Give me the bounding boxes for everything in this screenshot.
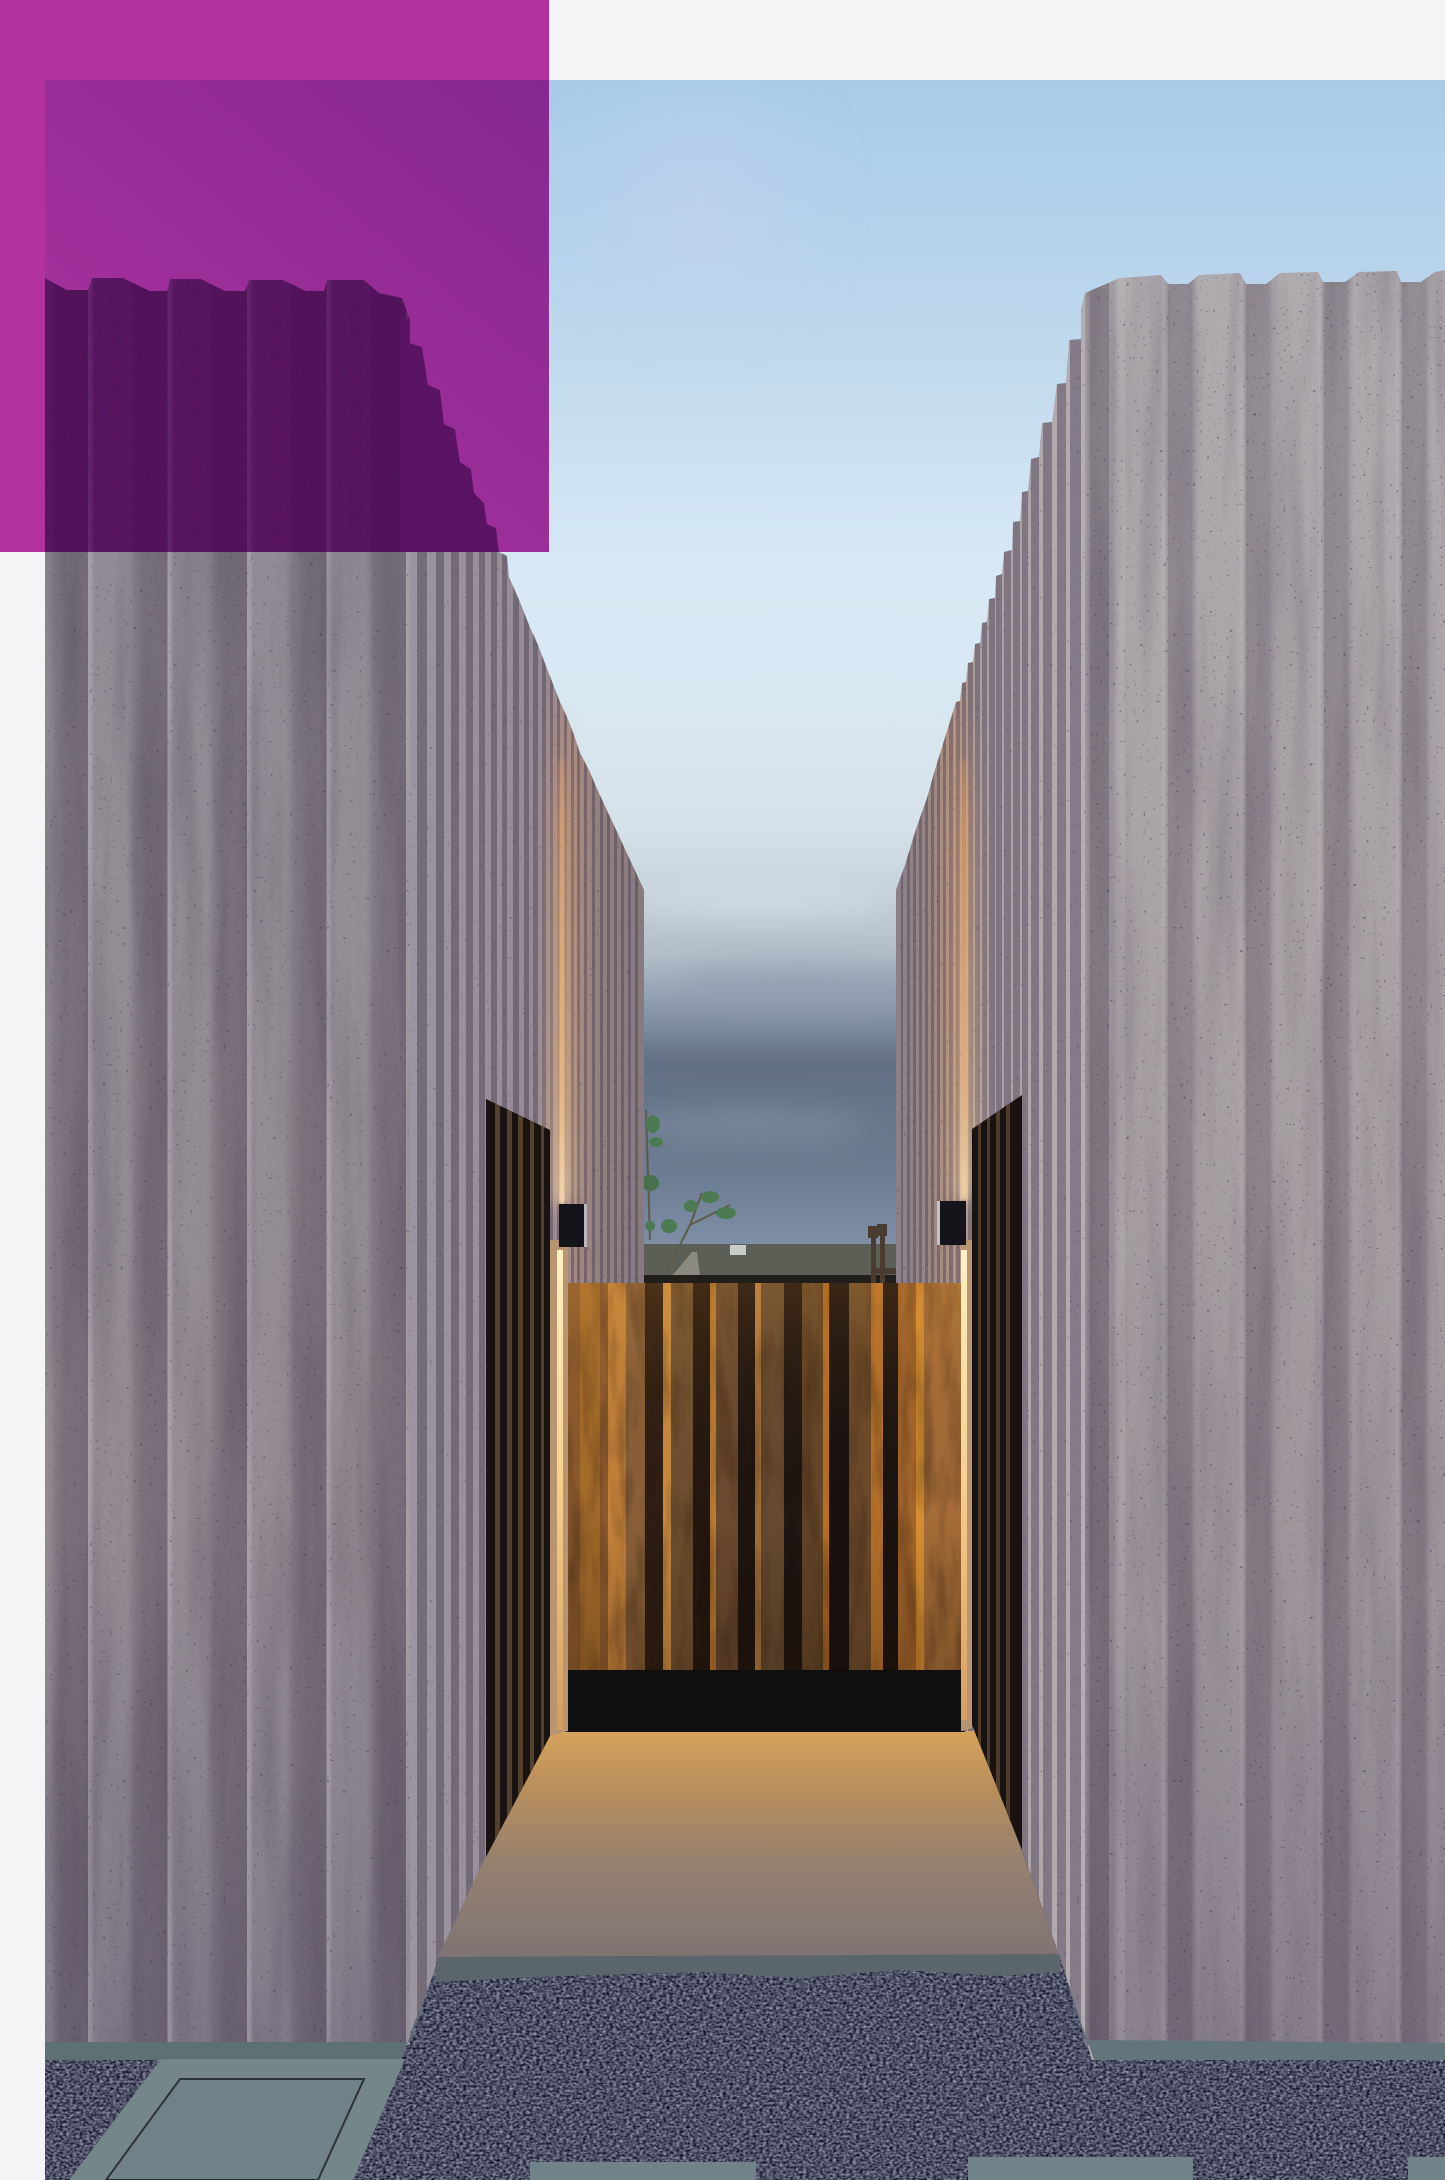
right wall: perspective fluted side [896,294,1094,2060]
icon: left wall lamp [559,1204,587,1247]
right pier below lamp [961,1240,972,1731]
gravel ground [45,1960,1445,2180]
dark recess below gate [560,1668,965,1732]
right wall: front fluted face [1085,265,1445,2050]
left wall plinth [45,1975,433,2060]
left paving slab [69,2059,405,2180]
icon: right wall lamp [937,1201,966,1245]
warm wall-wash glow right [954,700,976,1720]
sky [500,80,1445,1244]
panel: rusted corten gate [568,1283,961,1670]
concrete floor [438,1731,1060,1957]
right slatted steel door [972,1090,1022,1860]
rusted torches behind gate [868,1224,896,1283]
left slatted steel door [486,1095,550,1865]
wall side seen through magenta [400,319,499,552]
bottom paving slabs [530,2157,1445,2180]
floor step [434,1954,1060,1982]
left wall: perspective fluted side [410,552,644,2034]
wall seen through magenta [45,270,410,552]
sky seen through magenta [45,80,549,552]
distant landscape [640,1244,900,1284]
left wall: front fluted face [45,270,410,2050]
left pier below lamp [550,1240,568,1736]
warm wall-wash glow left [550,700,572,1730]
magenta square overlay [0,0,549,552]
ground underlay [437,1822,1061,1960]
right wall plinth [1070,1990,1445,2060]
icon: sapling [641,1110,736,1275]
